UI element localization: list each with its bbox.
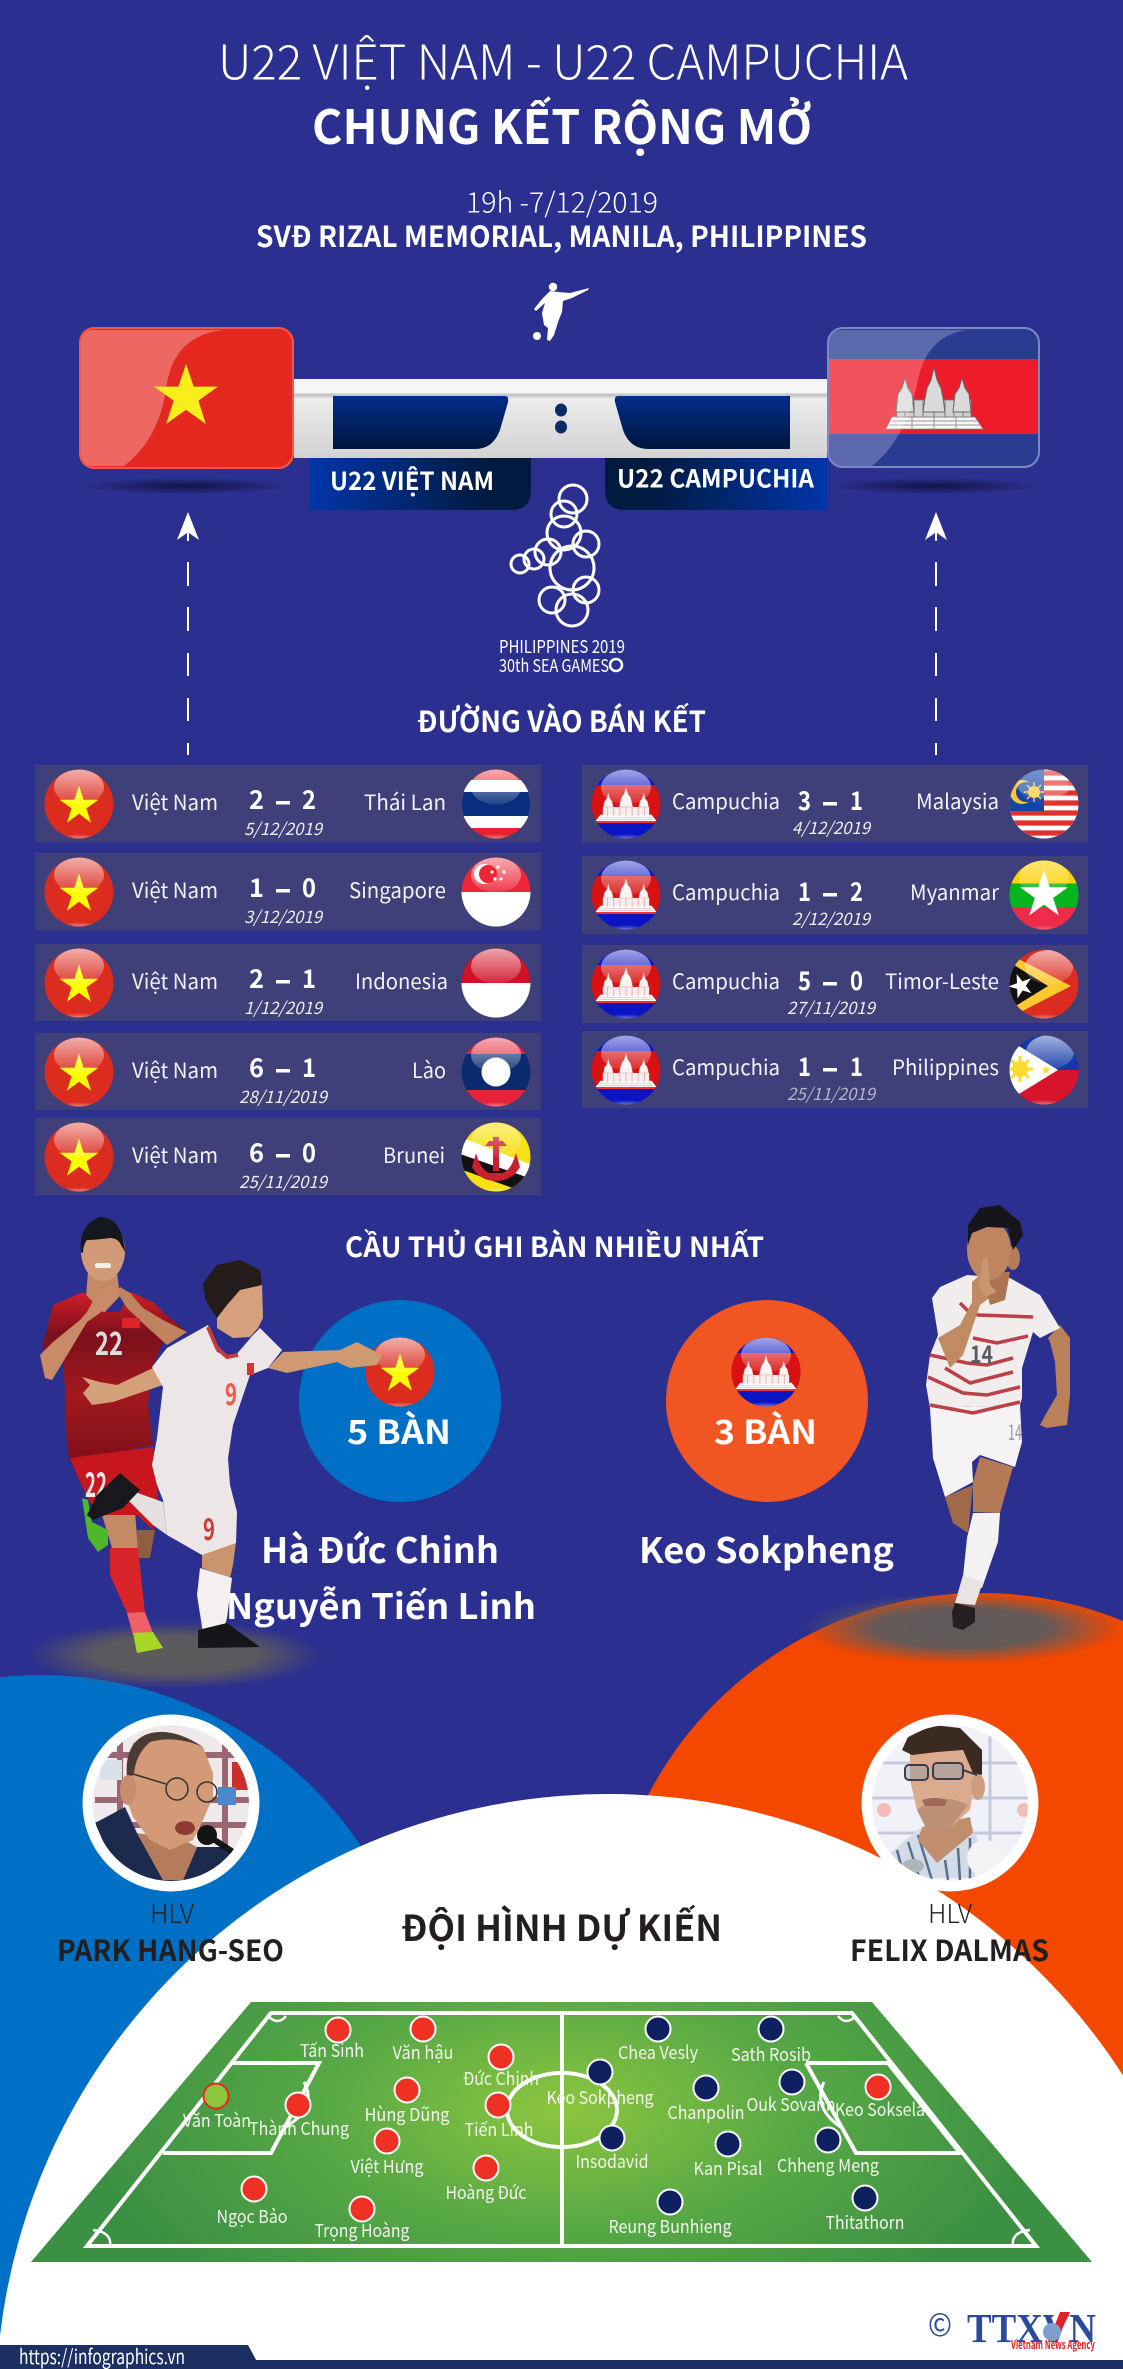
match row: Việt Nam 6-1 Lào: 6 [249, 1048, 264, 1085]
match row: Campuchia 1-1 Philippines: 1 [850, 1047, 863, 1084]
player figure: Đức Chinh in white [82, 1260, 382, 1648]
player figure: Tiến Linh in red [40, 1217, 187, 1653]
title [218, 24, 908, 158]
match row: Việt Nam 2-1 Indonesia: Việt Nam [132, 966, 218, 996]
flag: Vietnam large [79, 327, 294, 494]
match row: Việt Nam 2-2 Thái Lan: 2 [249, 780, 264, 817]
bottom arc background: orange [606, 1593, 1123, 2343]
line-up: Cambodia players: Chanpolin [668, 2099, 744, 2125]
match row: Campuchia 1-1 Philippines: Campuchia [672, 1052, 780, 1082]
line-up: Cambodia players: Keo Sokpheng [546, 2084, 654, 2110]
coach label: Felix Dalmas: HLV [928, 1894, 973, 1931]
scorer names: Hà Đức Chinh [261, 1523, 499, 1574]
player figure: Đức Chinh in white: 9 [203, 1505, 215, 1549]
match date and venue: 19h -7/12/2019 [466, 182, 658, 222]
results panel: Cambodia [582, 765, 1088, 1109]
scorer names: Nguyễn Tiến Linh [226, 1579, 536, 1630]
match row: Campuchia 5-0 Timor-Leste: Timor-Leste [885, 966, 999, 996]
match row: Việt Nam 2-2 Thái Lan: 5/12/2019 [244, 815, 325, 840]
line-up: Vietnam players: Thành Chung [249, 2115, 349, 2141]
line-up: Vietnam players: Văn Toàn [183, 2107, 251, 2133]
line-up: Vietnam players: Việt Hưng [350, 2153, 424, 2179]
match row: Việt Nam 2-2 Thái Lan: Thái Lan [364, 787, 446, 817]
match row: Việt Nam 6-1 Lào: 1 [302, 1048, 316, 1085]
logo: TTXVN: TTXVN [967, 2305, 1096, 2351]
match date and venue: SVĐ RIZAL MEMORIAL, MANILA, PHILIPPINES [256, 214, 867, 256]
line-up: Cambodia players: Ouk Sovann [746, 2091, 836, 2117]
line-up: Cambodia players: Keo Soksela [835, 2096, 925, 2122]
match row: Việt Nam 2-1 Indonesia: 1 [302, 959, 316, 996]
player figure: Đức Chinh in white: 9 [225, 1370, 237, 1414]
score panel left [333, 396, 508, 449]
scorer names: Keo Sokpheng [639, 1523, 894, 1574]
line-up: Cambodia players: Insodavid [576, 2148, 648, 2174]
portrait: Felix Dalmas [862, 1714, 1038, 1892]
logo: SEA Games 2019: PHILIPPINES 2019 [499, 633, 625, 659]
match row: Việt Nam 6-0 Brunei [35, 1118, 541, 1196]
shadow under Cambodia player [802, 1592, 1122, 1664]
team tab: U22 Campuchia [605, 458, 827, 510]
line-up: Cambodia players: Kan Pisal [694, 2155, 762, 2181]
bottom arc background: white dome [0, 1794, 1123, 2369]
match row: Việt Nam 2-1 Indonesia [35, 944, 541, 1022]
scorer names [226, 1523, 894, 1630]
match row: Campuchia 1-2 Myanmar: 1 [798, 872, 811, 909]
match row: Việt Nam 2-1 Indonesia: Indonesia [355, 966, 448, 996]
match row: Campuchia 5-0 Timor-Leste [582, 945, 1088, 1023]
logo: SEA Games 2019: 30th SEA GAMES [499, 652, 609, 678]
title: CHUNG KẾT RỘNG MỞ [312, 89, 812, 158]
line-up: Cambodia players: Chea Vesly [618, 2039, 699, 2065]
match row: Việt Nam 6-1 Lào: Lào [412, 1055, 446, 1085]
line-up: Vietnam players: Hùng Dũng [364, 2101, 450, 2127]
match row: Việt Nam 6-1 Lào: 28/11/2019 [239, 1083, 330, 1108]
heading: expected line-ups: ĐỘI HÌNH DỰ KIẾN [401, 1900, 722, 1952]
match row: Campuchia 1-2 Myanmar: 2/12/2019 [792, 905, 873, 930]
match row: Việt Nam 1-0 Singapore: 3/12/2019 [244, 903, 325, 928]
score panel right [615, 396, 790, 449]
goals badge: Cambodia: 3 BÀN [714, 1406, 817, 1454]
footer bar [0, 2360, 1123, 2369]
coach label: Park Hang-seo [57, 1894, 284, 1970]
portrait: Park Hang-seo [82, 1714, 260, 1892]
match row: Việt Nam 6-0 Brunei: 0 [302, 1133, 316, 1170]
line-up: Vietnam players: Đức Chinh [463, 2065, 539, 2091]
flag: Cambodia large [827, 327, 1040, 494]
goals badge: Cambodia [666, 1300, 868, 1502]
player figure: Keo Sokpheng: 14 [970, 1335, 993, 1370]
match row: Campuchia 1-2 Myanmar: 2 [850, 872, 863, 909]
line-up: Vietnam players: Trọng Hoàng [314, 2217, 410, 2243]
match row: Campuchia 1-1 Philippines: 25/11/2019 [787, 1080, 878, 1105]
match row: Việt Nam 1-0 Singapore [35, 853, 541, 931]
match row: Việt Nam 2-1 Indonesia: 1/12/2019 [244, 994, 325, 1019]
line-up: Vietnam players: Hoàng Đức [446, 2179, 526, 2205]
match row: Campuchia 3-1 Malaysia: 3 [798, 781, 811, 818]
shadow under Vietnam players [27, 1621, 323, 1689]
goals badge: Vietnam: 5 BÀN [347, 1406, 451, 1454]
results panel: Vietnam [35, 765, 541, 1196]
title: U22 VIỆT NAM - U22 CAMPUCHIA [218, 24, 908, 94]
match row: Việt Nam 6-1 Lào [35, 1033, 541, 1111]
match row: Việt Nam 1-0 Singapore: Singapore [349, 875, 446, 905]
team tab: U22 Campuchia: U22 CAMPUCHIA [617, 460, 815, 496]
match row: Campuchia 1-1 Philippines: 1 [798, 1047, 811, 1084]
coach label: Felix Dalmas: FELIX DALMAS [850, 1928, 1049, 1970]
logo: SEA Games 2019 [499, 485, 625, 678]
match row: Việt Nam 1-0 Singapore: 0 [302, 868, 316, 905]
bottom arc background: blue [0, 1675, 426, 2369]
match row: Campuchia 3-1 Malaysia [582, 765, 1088, 843]
coach label: Park Hang-seo: HLV [150, 1894, 195, 1931]
line-up: Vietnam players: Văn hậu [392, 2039, 454, 2065]
coach label: Park Hang-seo: PARK HANG-SEO [57, 1928, 284, 1970]
team tab: U22 Việt Nam [309, 458, 531, 510]
heading: road to the semi-finals: ĐƯỜNG VÀO BÁN KẾT [417, 699, 706, 741]
match row: Campuchia 5-0 Timor-Leste: 27/11/2019 [787, 994, 878, 1019]
goals badge: Vietnam [299, 1300, 501, 1502]
match row: Việt Nam 2-2 Thái Lan [35, 765, 541, 843]
match row: Campuchia 5-0 Timor-Leste: Campuchia [672, 966, 780, 996]
match row: Campuchia 3-1 Malaysia: Campuchia [672, 786, 780, 816]
line-up: Cambodia players: Thitathorn [826, 2209, 904, 2235]
player figure: Tiến Linh in red: 22 [85, 1458, 107, 1507]
match row: Campuchia 5-0 Timor-Leste: 5 [798, 961, 811, 998]
match row: Việt Nam 2-2 Thái Lan: Việt Nam [132, 787, 218, 817]
match row: Campuchia 5-0 Timor-Leste: 0 [850, 961, 863, 998]
line-up: Cambodia players: Reung Bunhieng [608, 2213, 732, 2239]
team tab: U22 Việt Nam: U22 VIỆT NAM [330, 462, 494, 498]
match row: Campuchia 1-1 Philippines [582, 1031, 1088, 1109]
match row: Campuchia 1-2 Myanmar: Myanmar [910, 877, 1000, 907]
match row: Việt Nam 2-2 Thái Lan: 2 [302, 780, 316, 817]
match row: Việt Nam 6-0 Brunei: Brunei [383, 1140, 445, 1170]
football pitch [31, 2002, 1092, 2262]
match row: Việt Nam 6-1 Lào: Việt Nam [132, 1055, 218, 1085]
match row: Việt Nam 1-0 Singapore: Việt Nam [132, 875, 218, 905]
line-up: Vietnam players: Ngọc Bảo [216, 2203, 288, 2229]
match row: Việt Nam 6-0 Brunei: 6 [249, 1133, 264, 1170]
line-up: Vietnam players [183, 2016, 539, 2243]
logo: TTXVN [928, 2300, 1096, 2353]
heading: top scorers: CẦU THỦ GHI BÀN NHIỀU NHẤT [345, 1226, 764, 1266]
match row: Campuchia 3-1 Malaysia: 4/12/2019 [792, 814, 873, 839]
match row: Việt Nam 2-1 Indonesia: 2 [249, 959, 264, 996]
match row: Campuchia 1-2 Myanmar: Campuchia [672, 877, 780, 907]
score colon [555, 404, 567, 434]
line-up: Vietnam players: Tấn Sinh [300, 2037, 364, 2063]
match date and venue [256, 182, 867, 256]
player figure: Keo Sokpheng [926, 1205, 1070, 1630]
match row: Việt Nam 6-0 Brunei: Việt Nam [132, 1140, 218, 1170]
match row: Việt Nam 6-0 Brunei: 25/11/2019 [239, 1168, 330, 1193]
line-up: Cambodia players: Sath Rosib [731, 2041, 811, 2067]
match row: Campuchia 3-1 Malaysia: Malaysia [916, 786, 999, 816]
player figure: Tiến Linh in red: 22 [95, 1319, 123, 1365]
line-up: Cambodia players [546, 2016, 925, 2239]
arrow: Vietnam path [177, 512, 199, 755]
logo: TTXVN: © [928, 2300, 952, 2346]
match row: Campuchia 3-1 Malaysia: 1 [850, 781, 863, 818]
scoreboard bar [294, 379, 827, 458]
match row: Campuchia 1-2 Myanmar [582, 856, 1088, 934]
coach label: Felix Dalmas [850, 1894, 1049, 1970]
match row: Việt Nam 1-0 Singapore: 1 [249, 868, 264, 905]
arrow: Cambodia path [925, 512, 947, 755]
line-up: Vietnam players: Tiến Linh [464, 2116, 534, 2142]
scoreboard [294, 379, 827, 510]
line-up: Cambodia players: Chheng Meng [777, 2152, 879, 2178]
player figure: Keo Sokpheng: 14 [1008, 1415, 1022, 1447]
match row: Campuchia 1-1 Philippines: Philippines [892, 1052, 999, 1082]
icon: football player silhouette [533, 283, 589, 341]
